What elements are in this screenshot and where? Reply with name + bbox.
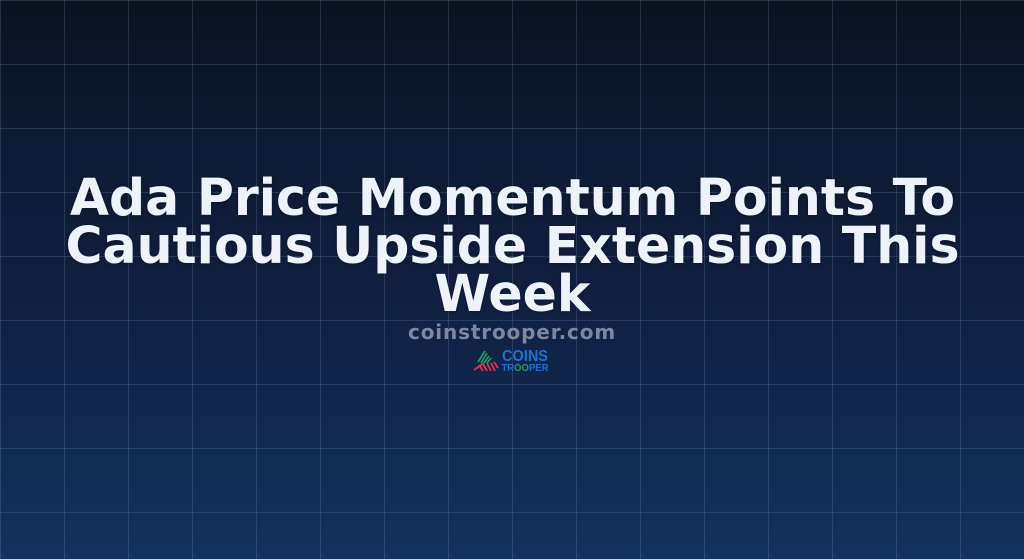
title: Cautious Upside Extension This	[65, 216, 960, 275]
logo word: coins: COINS	[502, 348, 548, 365]
icon: green peak	[478, 351, 491, 363]
title: Week	[434, 264, 590, 323]
title	[65, 168, 960, 323]
icon: red peak	[474, 362, 498, 371]
title: Ada Price Momentum Points To	[70, 168, 955, 227]
logo: Coins Trooper	[474, 348, 548, 374]
website text: coinstrooper.com	[408, 320, 616, 344]
logo word: trooper: TROOPER	[502, 363, 548, 374]
